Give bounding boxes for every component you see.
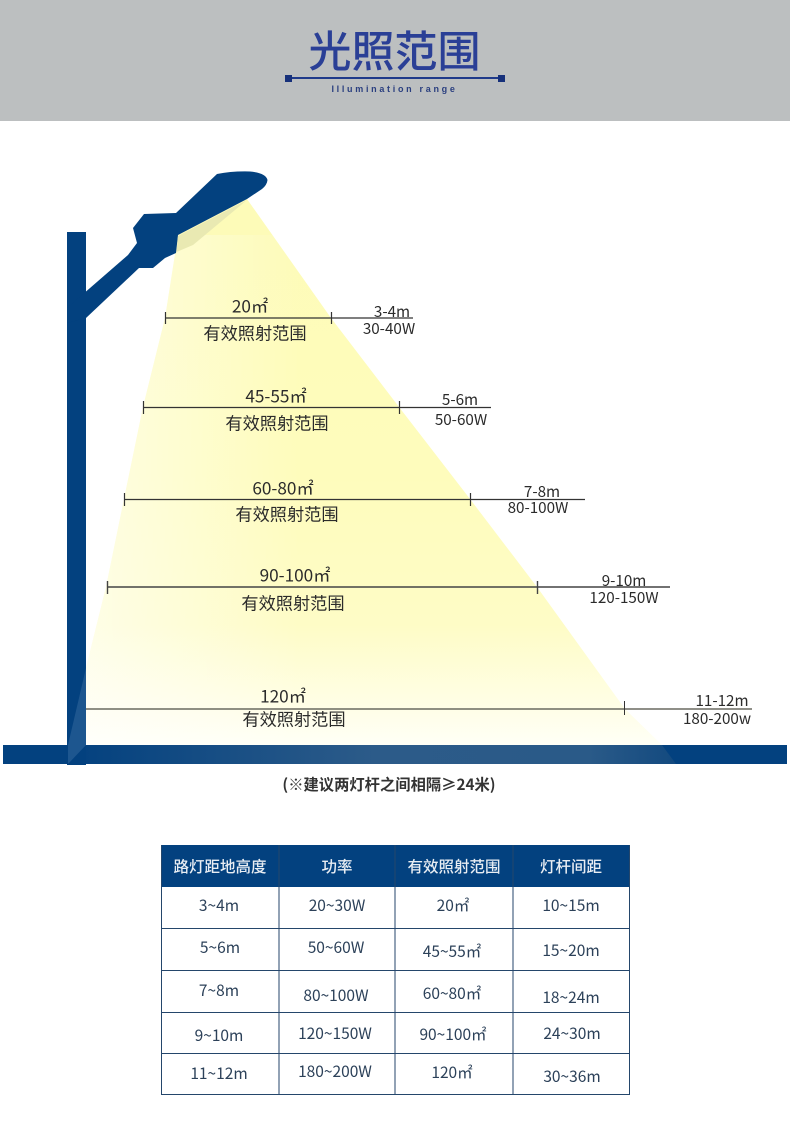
table header row: 路灯距地高度 (173, 855, 267, 877)
table row 2: 50~60W (308, 936, 365, 958)
table row 4: 9~10m (195, 1024, 243, 1046)
table row 1: 3~4m (199, 894, 239, 916)
range row: 7-8m: 7-8m (524, 480, 560, 502)
range row: 5-6m: 50-60W (435, 408, 487, 430)
table row 3: 80~100W (303, 984, 369, 1006)
table row 2: 15~20m (542, 939, 600, 961)
table header row: 功率 (321, 855, 353, 877)
range row: 11-12m: 11-12m (695, 689, 749, 711)
range row: 3-4m: 3-4m (374, 300, 410, 322)
range row: 5-6m: 有效照射范围 (225, 410, 329, 434)
range row: 7-8m: 60-80㎡ (252, 474, 314, 500)
range row: 9-10m: 9-10m (602, 569, 646, 591)
table row 4: 120~150W (298, 1022, 372, 1044)
range row: 9-10m: 有效照射范围 (241, 590, 345, 614)
range row: 5-6m (143, 382, 491, 434)
table row 2: 45~55㎡ (423, 940, 482, 962)
table row 3: 18~24m (542, 986, 600, 1008)
table row 1: 10~15m (542, 894, 600, 916)
range row: 9-10m (107, 562, 670, 614)
table grid (161, 845, 630, 1095)
range row: 7-8m: 80-100W (508, 496, 568, 518)
illumination diagram (3, 171, 787, 765)
table row 5: 180~200W (298, 1060, 372, 1082)
ground bar (3, 745, 787, 764)
table row 2 (200, 936, 600, 962)
title: 光照范围 (308, 18, 480, 80)
range row: 7-8m (124, 474, 585, 526)
range row: 11-12m: 180-200w (683, 707, 751, 729)
spacing note: (※建议两灯杆之间相隔≥24米) (282, 773, 496, 795)
table row 1 (199, 894, 600, 916)
table row 5: 11~12m (190, 1062, 248, 1084)
table row 4: 24~30m (543, 1022, 601, 1044)
light beam (68, 199, 662, 745)
range row: 5-6m: 45-55㎡ (245, 382, 307, 408)
table row 4: 90~100㎡ (419, 1023, 487, 1045)
table row 3: 60~80㎡ (423, 982, 482, 1004)
table row 5: 30~36m (543, 1065, 601, 1087)
range row: 3-4m: 有效照射范围 (203, 320, 307, 344)
range row: 3-4m (165, 292, 415, 344)
table row 3 (199, 979, 600, 1008)
table row 5 (190, 1060, 601, 1087)
table row 4 (195, 1022, 601, 1046)
table row 1: 20~30W (309, 894, 366, 916)
range row: 7-8m: 有效照射范围 (235, 500, 339, 526)
header band (0, 0, 790, 121)
range row: 11-12m (86, 682, 752, 730)
range row: 9-10m: 90-100㎡ (260, 562, 330, 586)
data table (161, 845, 630, 1095)
range row: 11-12m: 有效照射范围 (242, 706, 346, 730)
range row: 3-4m: 20㎡ (232, 292, 268, 318)
table row 1: 20㎡ (437, 894, 470, 916)
table header row (161, 845, 630, 887)
range row: 5-6m: 5-6m (442, 388, 478, 410)
table header row: 有效照射范围 (407, 855, 501, 877)
street light pole (67, 232, 86, 765)
table row 5: 120㎡ (431, 1061, 473, 1083)
range row: 3-4m: 30-40W (363, 317, 415, 339)
subtitle: Illumination range (331, 84, 458, 94)
table row 2: 5~6m (200, 936, 240, 958)
lamp head and arm (67, 171, 268, 323)
title rule with end squares (285, 75, 505, 82)
range row: 9-10m: 120-150W (589, 586, 659, 608)
range row: 11-12m: 120㎡ (260, 682, 306, 708)
table row 3: 7~8m (199, 979, 239, 1001)
table header row: 灯杆间距 (540, 855, 602, 877)
